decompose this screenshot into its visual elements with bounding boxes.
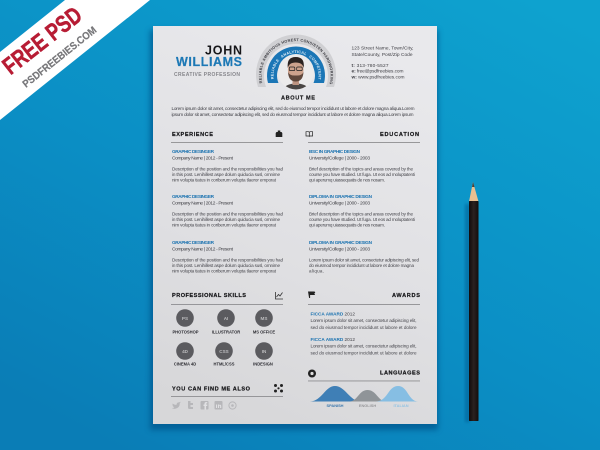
icon: globe <box>308 370 316 378</box>
badge with portrait and skill arcs <box>256 34 336 90</box>
language labels: ENGLISH <box>359 403 376 408</box>
experience heading: EXPERIENCE <box>172 132 213 138</box>
job 3: in this post. Lenihillest aspe dolum quiducia susl, omnime <box>172 263 280 268</box>
contact details: w: www.psdfreebies.com <box>350 74 404 80</box>
degree 1: course you have studied. Ut fuga. Ut eos ad moluptatenti <box>309 172 415 177</box>
icon: book <box>306 132 313 136</box>
skill circles: CSS <box>219 349 229 354</box>
panel: experience <box>171 130 283 274</box>
contact details <box>350 46 414 80</box>
skill labels: INDESIGN <box>253 362 273 366</box>
degree 1: qui aperumq uiassequatis de nos nosam. <box>309 178 385 182</box>
job 3: Company Name | 2012 - Present <box>172 246 234 252</box>
about me paragraph <box>172 106 415 117</box>
icon: basket <box>276 130 282 137</box>
job 2: in this post. Lenihillest aspe dolum quiducia susl, omnime <box>172 217 280 222</box>
award 2: sed do eiusmod tempor incididunt ut labore et dolore <box>310 350 417 356</box>
skill circles: IN <box>262 349 267 354</box>
degree 3: University/College | 2000 - 2003 <box>309 246 370 252</box>
job 1: Company Name | 2012 - Present <box>172 156 234 162</box>
resume paper <box>153 26 437 424</box>
skill labels: MS OFFICE <box>253 330 275 334</box>
panel: awards <box>308 292 420 356</box>
degree 3: aliqua. <box>309 268 324 274</box>
skill circles: 4D <box>182 349 189 354</box>
degree 2: Brief description of the topics and areas covered by the <box>309 212 413 216</box>
name block: JOHN <box>205 43 242 57</box>
award 1 <box>310 312 417 330</box>
award 2 <box>310 337 417 356</box>
education heading: EDUCATION <box>380 132 419 138</box>
job 1: nim volupta tiatus in coriberum volupta tlaeror emporat <box>172 178 277 182</box>
panel: social links <box>171 384 283 410</box>
skill labels <box>172 330 275 366</box>
skill circles: PS <box>182 316 188 321</box>
skill circles: MS <box>261 316 267 321</box>
award 2: FICCA AWARD 2012 <box>310 337 355 342</box>
icon: flag <box>308 292 315 298</box>
job 2: Description of the position and the responsibilities you had <box>172 212 283 216</box>
contact details: t: 313-780-5527 <box>352 63 389 69</box>
contact details: State/County, Post/Zip Code <box>352 52 413 58</box>
degree 3: do eiusmod tempor incididunt ut labore et dolore magna <box>309 263 414 268</box>
icon: pencil <box>469 182 478 421</box>
outer arc words: RELIABLE AMBITIOUS HONEST CONSISTEN HARDWORKING <box>258 38 334 84</box>
blue arc <box>267 46 325 83</box>
degree 1: University/College | 2000 - 2003 <box>309 156 370 162</box>
social heading: YOU CAN FIND ME ALSO <box>172 386 251 392</box>
language bell chart <box>310 386 418 402</box>
language labels: ITALIAN <box>393 403 409 408</box>
job 1: Description of the position and the responsibilities you had <box>172 166 283 172</box>
degree 3: DIPLOMA IN GRAPHIC DESIGN <box>309 240 373 245</box>
job 1: GRAPHIC DESINGER <box>172 149 215 154</box>
language labels: SPANISH <box>326 403 344 408</box>
portrait <box>278 54 314 90</box>
skills heading: PROFESSIONAL SKILLS <box>172 293 246 299</box>
skill circles: AI <box>224 316 228 321</box>
degree 2: qui aperumq uiassequatis de nos nosam. <box>309 222 385 228</box>
degree 3: Lorem ipsum dolor sit amet, consectetur adipiscing elit, sed <box>309 258 419 262</box>
award 1: FICCA AWARD 2012 <box>310 312 355 316</box>
skill labels: HTML/CSS <box>214 362 235 366</box>
award 2: Lorem ipsum dolor sit amet, consectetur adipiscing elit, <box>310 344 416 348</box>
contact details: 123 Street Name, Town/City, <box>352 46 414 52</box>
job 2 <box>172 194 283 228</box>
job 3: nim volupta tiatus in coriberum volupta tlaeror emporat <box>172 268 277 274</box>
name block <box>174 43 242 78</box>
panel: education <box>306 132 420 274</box>
job 1: in this post. Lenihillest aspe dolum quiducia susl, omnime <box>172 172 280 177</box>
job 1 <box>172 149 283 182</box>
language labels <box>326 403 409 408</box>
job 2: Company Name | 2012 - Present <box>172 200 234 206</box>
panel: professional skills <box>171 292 283 366</box>
name block: CREATIVE PROFESSION <box>174 72 240 78</box>
name block: WILLIAMS <box>176 55 242 69</box>
skill circles <box>176 309 273 360</box>
degree 2: course you have studied. Ut fuga. Ut eos ad moluptatenti <box>309 217 415 222</box>
award 1: sed do eiusmod tempor incididunt ut labore et dolore <box>310 325 417 330</box>
awards heading: AWARDS <box>392 293 420 299</box>
languages heading: LANGUAGES <box>380 370 420 376</box>
ribbon site: PSDFREEBIES.COM <box>20 24 99 90</box>
about me heading: ABOUT ME <box>281 96 315 102</box>
degree 3 <box>309 240 419 274</box>
contact details: e: free@psdfreebies.com <box>352 68 404 74</box>
degree 1 <box>309 149 415 182</box>
social icons <box>172 401 236 410</box>
job 2: GRAPHIC DESINGER <box>172 194 215 199</box>
icon: line chart <box>276 292 283 299</box>
pencil shadow <box>465 204 470 422</box>
degree 2 <box>309 194 415 228</box>
panel: languages <box>308 370 420 408</box>
paper shadow <box>150 30 438 430</box>
degree 2: University/College | 2000 - 2003 <box>309 200 370 206</box>
corner ribbon <box>0 0 150 120</box>
skill labels: CINEMA 4D <box>174 362 196 366</box>
degree 1: BSC IN GRAPHIC DESIGN <box>309 149 361 154</box>
job 3: GRAPHIC DESINGER <box>172 240 215 245</box>
job 2: nim volupta tiatus in coriberum volupta tlaeror emporat <box>172 222 277 228</box>
degree 1: Brief description of the topics and areas covered by the <box>309 166 413 172</box>
degree 2: DIPLOMA IN GRAPHIC DESIGN <box>309 194 373 199</box>
skill labels: PHOTOSHOP <box>172 330 199 334</box>
job 3: Description of the position and the responsibilities you had <box>172 258 283 262</box>
icon: share nodes <box>274 384 283 392</box>
job 3 <box>172 240 283 274</box>
about me paragraph: Lorem ipsum dolor sit amet, consectetur adipiscing elit, sed do eiusmod tempor incididunt ut labore et dolore magna aliqua.Lorem <box>172 106 415 111</box>
skill labels: ILLUSTRATOR <box>212 330 240 334</box>
award 1: Lorem ipsum dolor sit amet, consectetur adipiscing elit, <box>310 318 416 323</box>
about me paragraph: ipsum dolor sit amet, consectetur adipiscing elit, sed do eiusmod tempor incididunt ut labore et dolore magna aliqua.Lorem ipsum <box>172 112 414 117</box>
blue arc words: RELIABLE ANALYTICAL COMPETENT <box>270 50 322 80</box>
